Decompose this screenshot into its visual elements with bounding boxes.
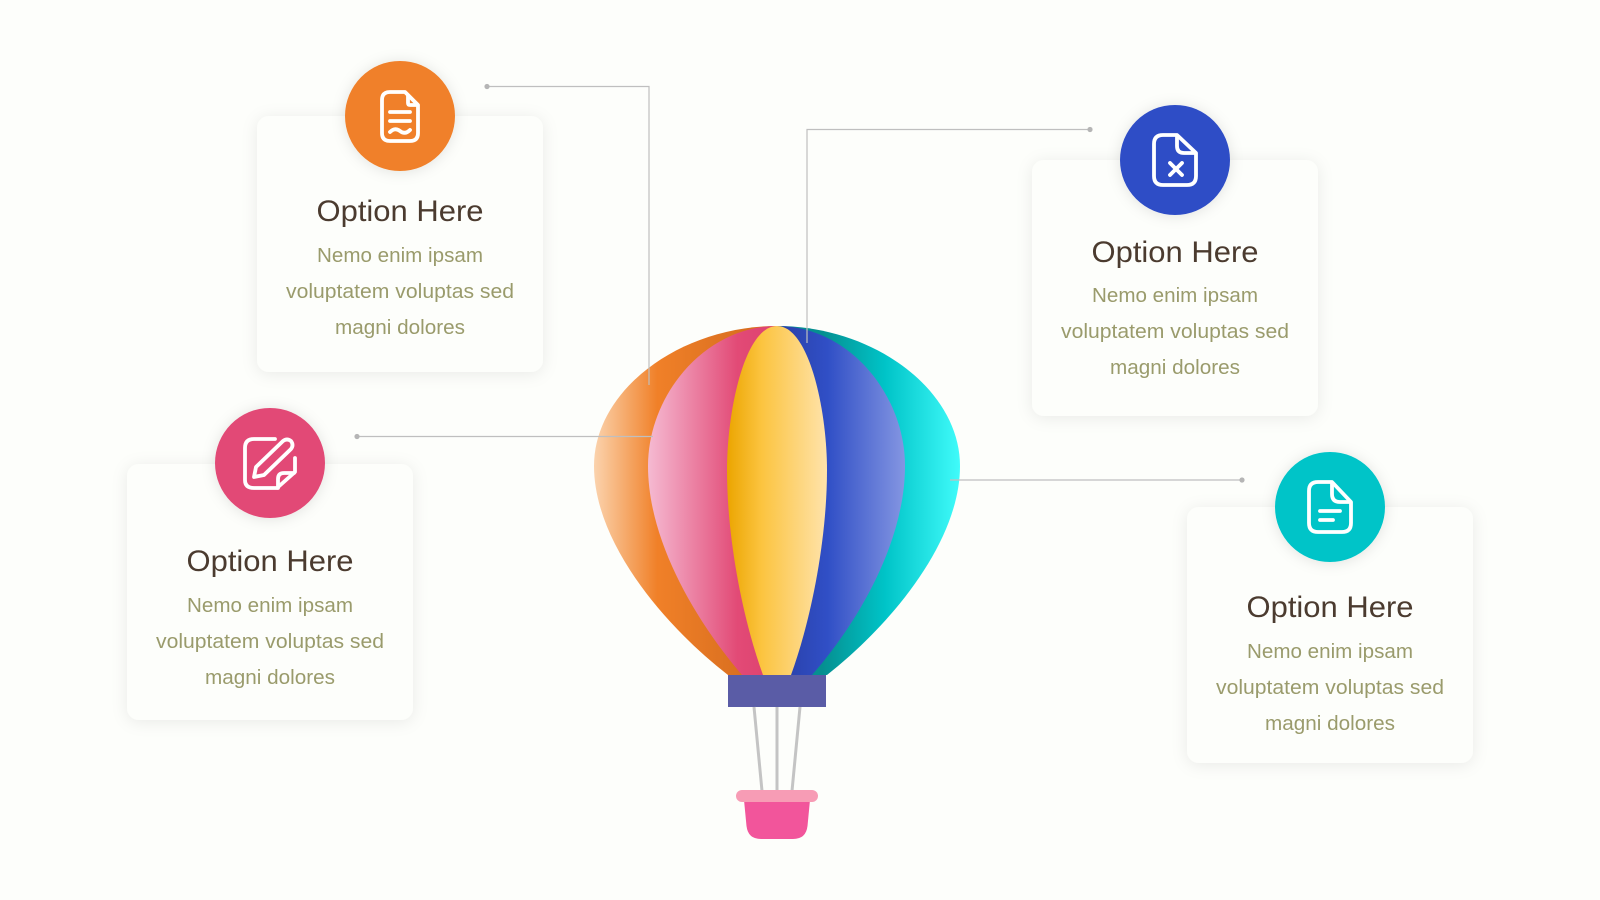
card — [1032, 160, 1318, 416]
text block — [1216, 641, 1444, 735]
text block — [286, 245, 514, 339]
panel: option 2 — [1032, 105, 1318, 416]
text block: voluptatem voluptas sed — [156, 631, 384, 653]
connector: option 2 — [807, 127, 1093, 343]
balloon panel: pink — [648, 326, 777, 675]
heading: Option Here — [186, 545, 354, 578]
card — [127, 464, 413, 720]
balloon basket — [744, 800, 810, 839]
text block: magni dolores — [335, 317, 465, 339]
connector: option 3 — [354, 434, 653, 439]
icon: document with text — [1309, 482, 1351, 532]
badge: orange — [345, 61, 455, 171]
text block: Nemo enim ipsam — [317, 245, 483, 267]
connector: option 1 — [484, 84, 649, 385]
badge: teal — [1275, 452, 1385, 562]
text block: voluptatem voluptas sed — [286, 281, 514, 303]
text block: Nemo enim ipsam — [1247, 641, 1413, 663]
text block: Nemo enim ipsam — [1092, 285, 1258, 307]
card — [257, 116, 543, 372]
balloon ropes — [754, 707, 800, 791]
badge: blue — [1120, 105, 1230, 215]
heading: Option Here — [1246, 591, 1414, 624]
text block: magni dolores — [1110, 357, 1240, 379]
panel: option 1 — [257, 61, 543, 372]
balloon basket rim — [736, 790, 818, 802]
text block: voluptatem voluptas sed — [1216, 677, 1444, 699]
heading: Option Here — [1092, 236, 1258, 269]
card — [1187, 507, 1473, 763]
text block: magni dolores — [1265, 713, 1395, 735]
panel: option 3 — [127, 408, 413, 720]
text block — [156, 595, 384, 689]
balloon — [594, 326, 960, 839]
text block: voluptatem voluptas sed — [1061, 321, 1289, 343]
text block: magni dolores — [205, 667, 335, 689]
text block: Nemo enim ipsam — [187, 595, 353, 617]
connector: option 4 — [950, 477, 1245, 483]
icon: document with lines — [382, 92, 418, 141]
balloon panel: teal — [777, 326, 960, 675]
icon: note with pencil — [245, 439, 295, 488]
icon: document with x — [1154, 135, 1196, 185]
heading: Option Here — [316, 195, 484, 228]
balloon panel: blue — [777, 326, 905, 675]
badge: pink — [215, 408, 325, 518]
text block — [1061, 285, 1289, 379]
balloon collar — [728, 675, 826, 707]
balloon panel: orange — [594, 326, 777, 675]
balloon panel: yellow — [727, 326, 827, 675]
panel: option 4 — [1187, 452, 1473, 763]
